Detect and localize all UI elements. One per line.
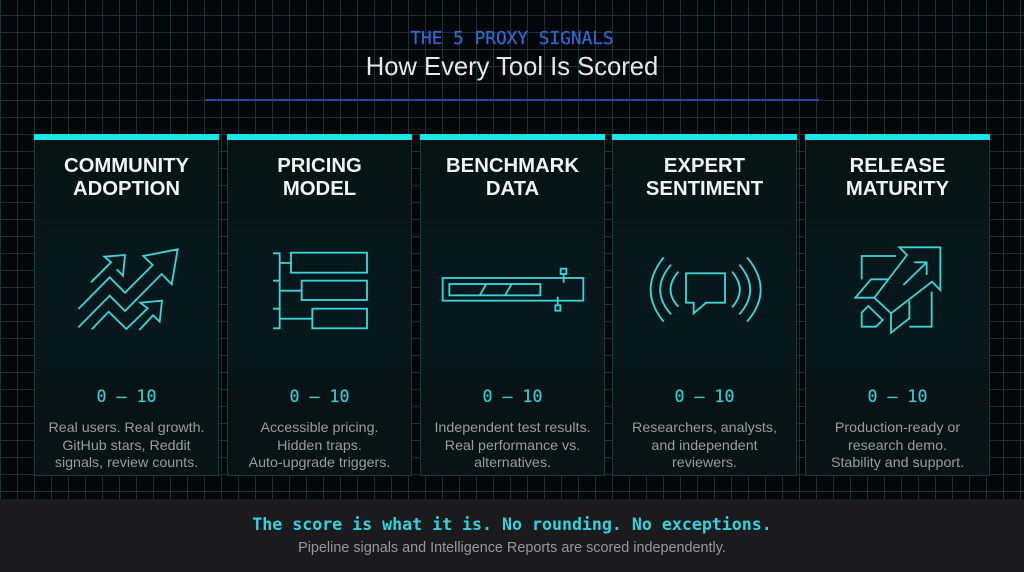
- heading: community adoption: ADOPTION: [73, 178, 180, 200]
- description: benchmark data: [434, 420, 591, 471]
- description: community adoption: GitHub stars, Reddit: [62, 438, 191, 454]
- heading: expert sentiment: [646, 155, 763, 200]
- eyebrow heading: THE 5 PROXY SIGNALS: [410, 28, 614, 49]
- panel: pricing model: [227, 134, 412, 476]
- heading: expert sentiment: SENTIMENT: [646, 178, 763, 200]
- header rule: [205, 99, 819, 101]
- description: pricing model: Hidden traps.: [277, 438, 362, 454]
- heading: release maturity: [846, 155, 949, 200]
- heading: expert sentiment: EXPERT: [664, 155, 745, 177]
- footer band: [0, 499, 1024, 572]
- footer note: Pipeline signals and Intelligence Reports are scored independently.: [298, 540, 726, 556]
- heading: release maturity: MATURITY: [846, 178, 949, 200]
- description: release maturity: [831, 420, 964, 471]
- heading: community adoption: COMMUNITY: [64, 155, 189, 177]
- heading: pricing model: PRICING: [277, 155, 362, 177]
- heading: benchmark data: DATA: [486, 178, 539, 200]
- description: expert sentiment: Researchers, analysts,: [632, 420, 777, 436]
- panel: expert sentiment: [612, 134, 797, 476]
- heading: pricing model: [277, 155, 362, 200]
- heading: community adoption: [64, 155, 189, 200]
- icon: pricing tiers: [273, 252, 368, 330]
- heading: benchmark data: BENCHMARK: [446, 155, 579, 177]
- description: pricing model: [248, 420, 390, 471]
- description: community adoption: Real users. Real growth.: [48, 420, 205, 436]
- icon: speech bubble with signal waves: [650, 256, 762, 322]
- score: expert sentiment: 0 – 10: [675, 387, 734, 406]
- title: How Every Tool Is Scored: [366, 53, 658, 81]
- description: release maturity: research demo.: [848, 438, 947, 454]
- description: expert sentiment: and independent: [651, 438, 758, 454]
- icon: release rocket arrow: [853, 246, 942, 334]
- score: pricing model: 0 – 10: [290, 387, 349, 406]
- description: community adoption: signals, review counts.: [55, 455, 198, 471]
- description: pricing model: Auto-upgrade triggers.: [249, 455, 390, 471]
- description: community adoption: [48, 420, 205, 471]
- panel: release maturity: [805, 134, 990, 476]
- score: release maturity: 0 – 10: [868, 387, 927, 406]
- panel: community adoption: [34, 134, 219, 476]
- footer statement: The score is what it is. No rounding. No exceptions.: [252, 515, 772, 534]
- heading: benchmark data: [446, 155, 579, 200]
- description: release maturity: Stability and support.: [831, 455, 964, 471]
- description: expert sentiment: [632, 420, 777, 471]
- description: expert sentiment: reviewers.: [672, 455, 737, 471]
- icon: benchmark bar: [442, 268, 584, 312]
- score: benchmark data: 0 – 10: [483, 387, 542, 406]
- description: benchmark data: alternatives.: [474, 455, 551, 471]
- description: release maturity: Production-ready or: [835, 420, 960, 436]
- score: community adoption: 0 – 10: [97, 387, 156, 406]
- heading: pricing model: MODEL: [283, 178, 356, 200]
- heading: release maturity: RELEASE: [850, 155, 945, 177]
- icon: rising arrows: [78, 248, 179, 330]
- description: benchmark data: Independent test results.: [434, 420, 591, 436]
- description: benchmark data: Real performance vs.: [445, 438, 580, 454]
- panel: benchmark data: [420, 134, 605, 476]
- description: pricing model: Accessible pricing.: [260, 420, 378, 436]
